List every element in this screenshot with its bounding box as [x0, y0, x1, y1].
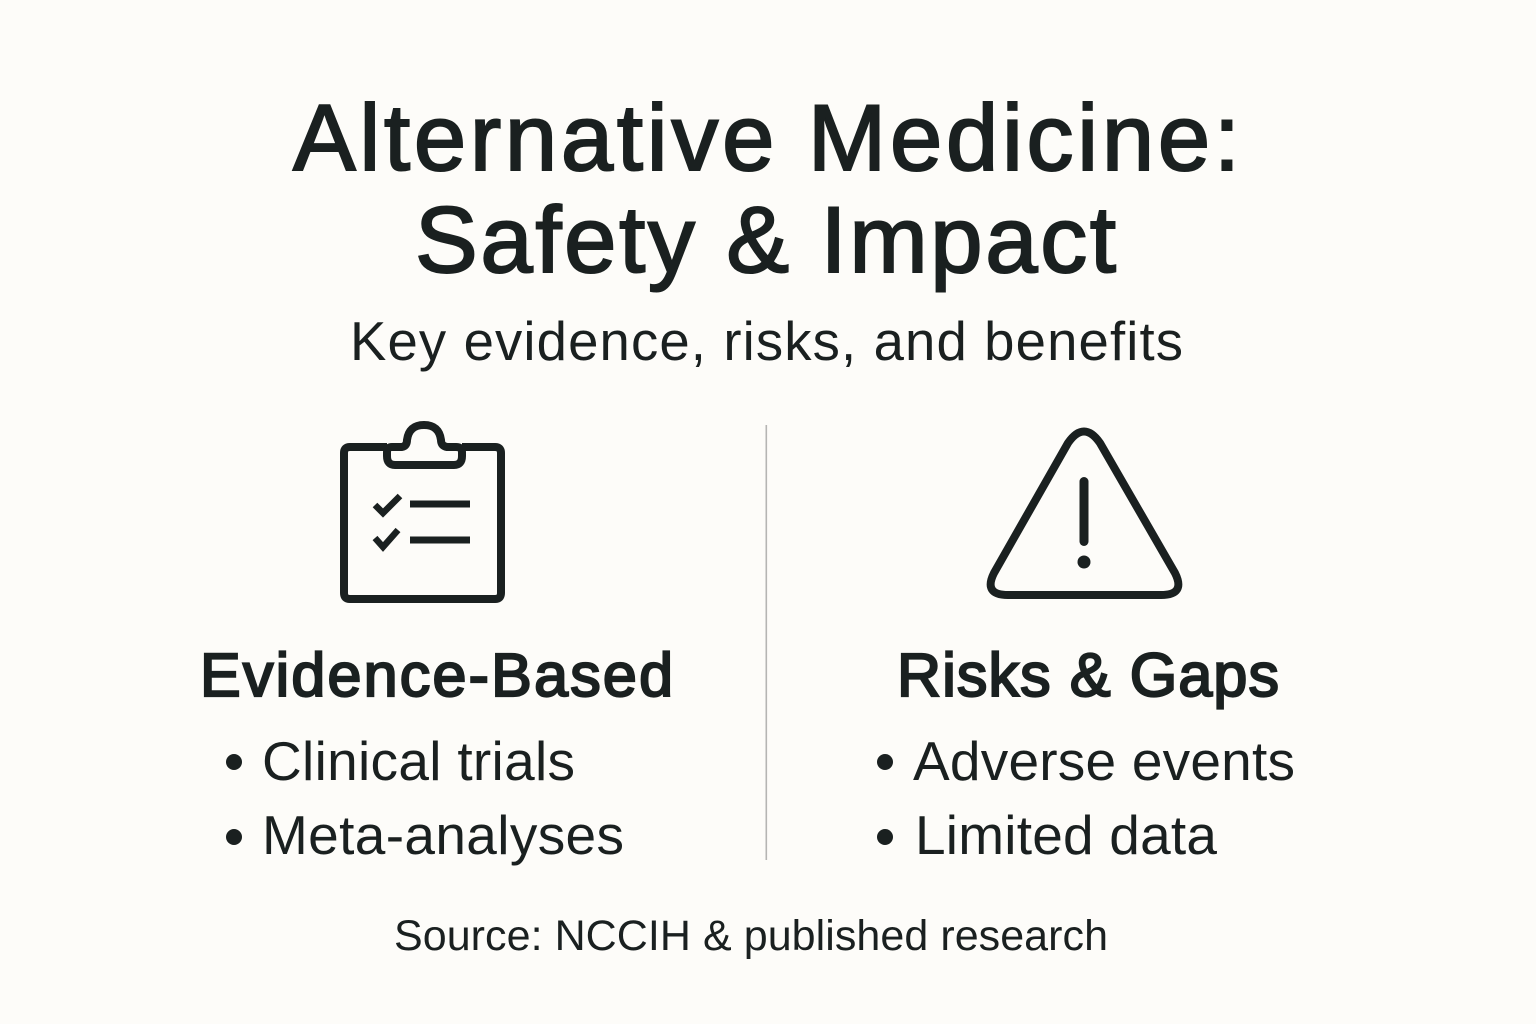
list: evidence items: Meta-analyses [262, 804, 624, 866]
panel: risks and gaps [877, 432, 1295, 866]
subtitle: Key evidence, risks, and benefits [350, 311, 1183, 372]
list: risk items: Adverse events [913, 730, 1295, 792]
icon: warning triangle [991, 432, 1178, 595]
heading: risks and gaps: Risks & Gaps [897, 641, 1279, 709]
heading: evidence-based: Evidence-Based [200, 641, 673, 709]
title: Safety & Impact [415, 187, 1116, 292]
icon: clipboard with checklist [344, 425, 501, 599]
title [293, 85, 1240, 292]
title: Alternative Medicine: [293, 85, 1240, 190]
list: risk items: Limited data [915, 804, 1217, 866]
list: evidence items [226, 730, 624, 866]
list: evidence items: Clinical trials [262, 730, 575, 792]
source note: Source: NCCIH & published research [394, 912, 1108, 960]
list: risk items [877, 730, 1295, 866]
panel: evidence-based [200, 425, 673, 866]
